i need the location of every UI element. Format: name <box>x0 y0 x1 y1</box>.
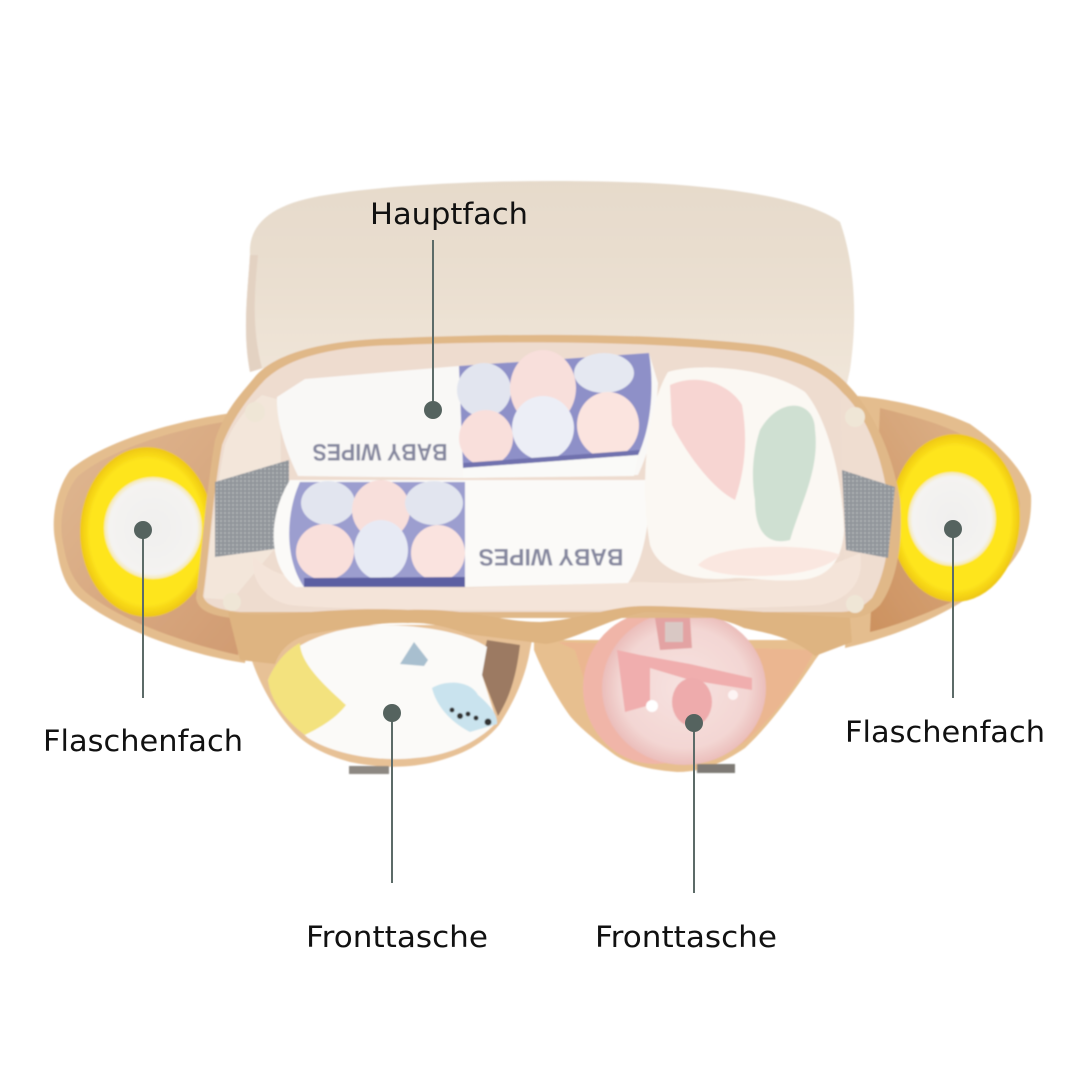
wipes label top: BABY WIPES <box>312 438 448 465</box>
main body <box>196 335 901 618</box>
left yellow bottle <box>80 447 214 617</box>
right bottle pocket <box>845 396 1031 648</box>
drawstring knots <box>245 402 265 422</box>
callout: Flaschenfach right: Flaschenfach <box>845 715 1045 749</box>
callout: Hauptfach <box>370 197 528 419</box>
baby wipes top <box>277 350 658 478</box>
flap <box>246 181 854 392</box>
pacifier ball <box>583 611 766 765</box>
left bottle pocket <box>54 413 262 663</box>
inner cushion <box>253 553 861 610</box>
callout: Fronttasche right <box>595 714 777 954</box>
baby wipes bottom <box>274 480 649 587</box>
callout: Hauptfach: Hauptfach <box>370 197 528 231</box>
grey straps <box>215 460 895 558</box>
callout: Fronttasche right: Fronttasche <box>595 920 777 954</box>
front pocket left <box>240 625 535 774</box>
bag illustration <box>54 181 1031 774</box>
front band <box>228 606 852 664</box>
callout: Flaschenfach left <box>43 521 243 758</box>
right yellow bottle <box>890 434 1020 602</box>
callout: Flaschenfach left: Flaschenfach <box>43 724 243 758</box>
callout: Fronttasche left: Fronttasche <box>306 920 488 954</box>
callout: Fronttasche left <box>306 704 488 954</box>
wipes label bottom: BABY WIPES <box>478 543 624 570</box>
front pocket right <box>534 611 830 773</box>
callout: Flaschenfach right <box>845 520 1045 749</box>
cloth bundle <box>645 367 844 581</box>
